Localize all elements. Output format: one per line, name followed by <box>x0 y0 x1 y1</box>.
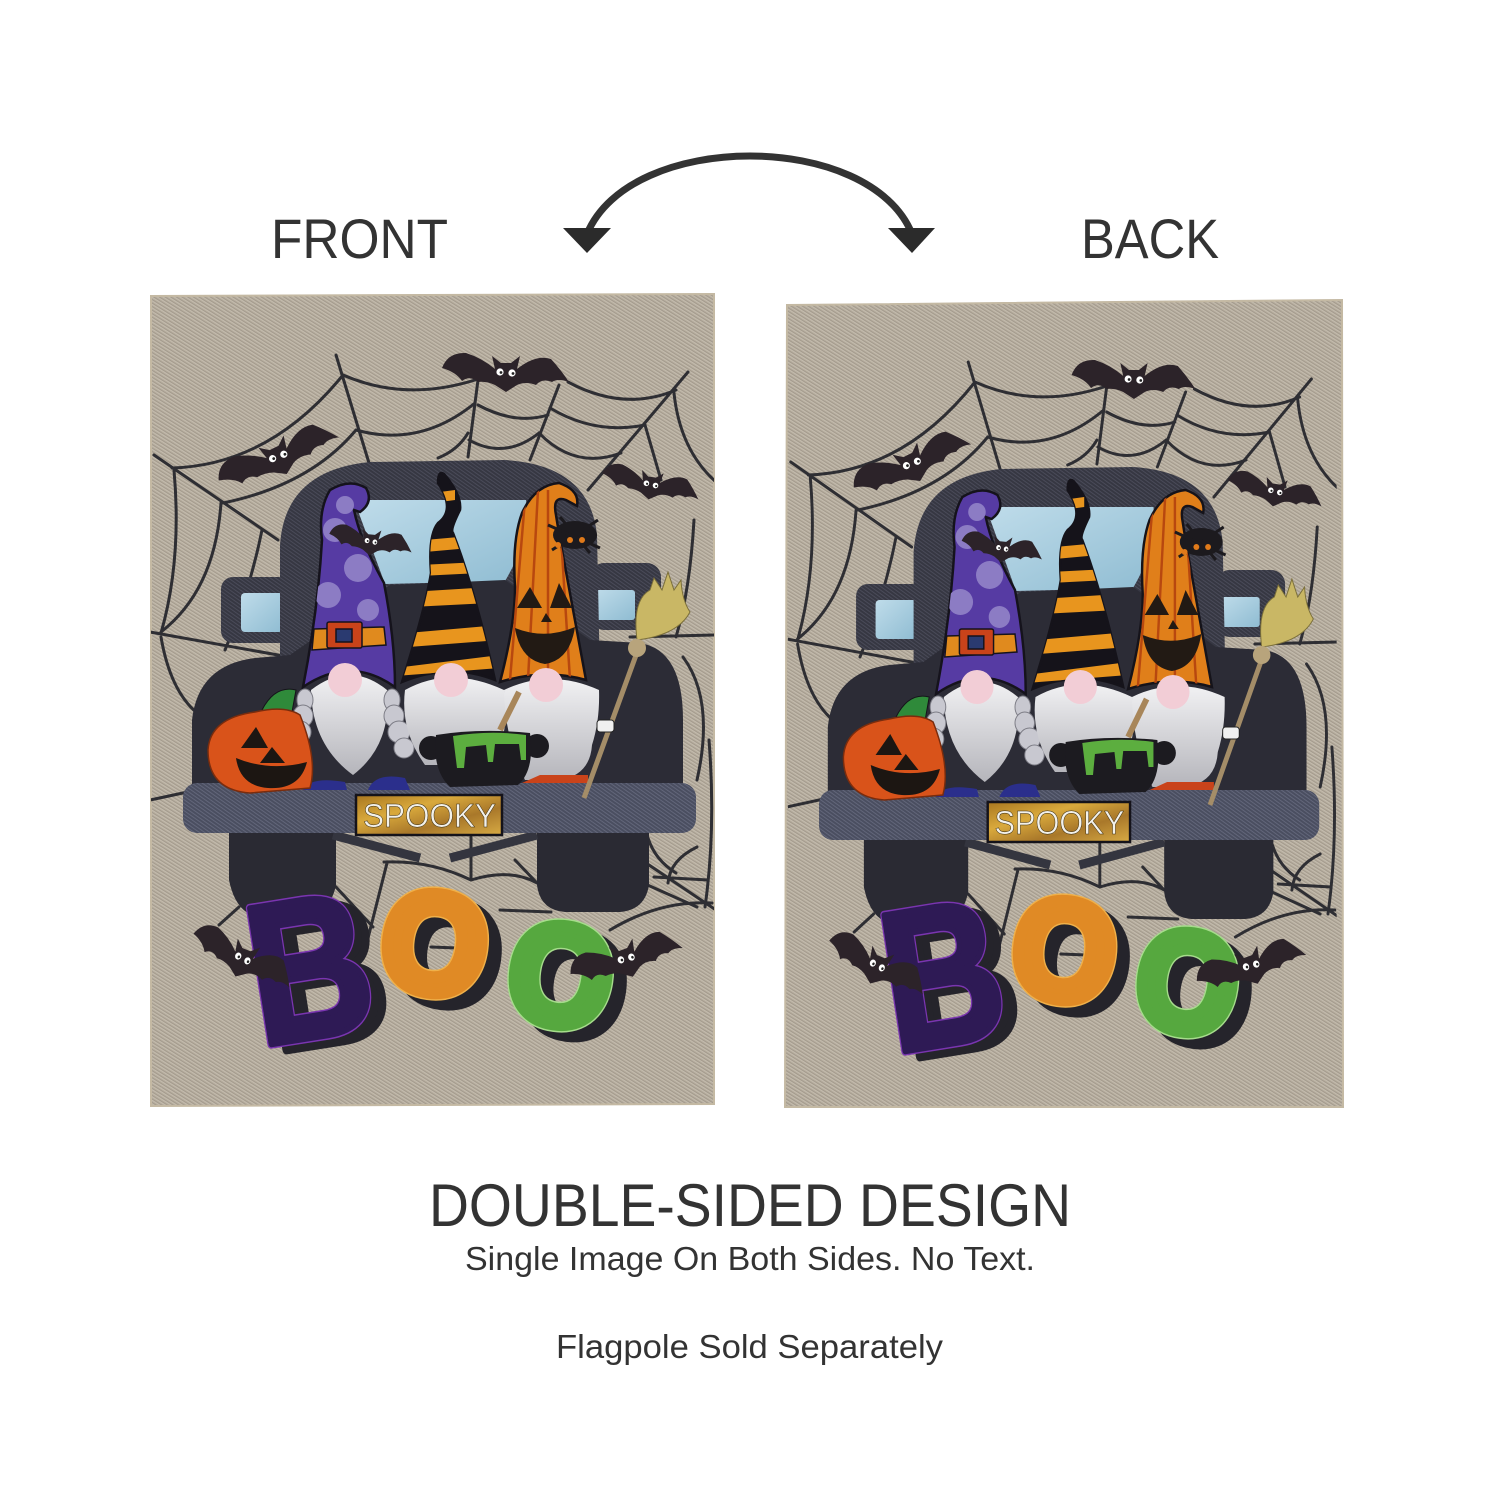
broom <box>584 572 690 798</box>
right braid <box>384 689 414 758</box>
right mirror <box>590 563 661 630</box>
BOO lettering <box>232 847 637 1096</box>
glitter bat on hat <box>327 523 414 560</box>
buckle <box>327 622 362 648</box>
letter O green: O <box>512 900 635 1070</box>
beard <box>404 678 506 765</box>
truck bed and fenders <box>192 580 683 790</box>
knob <box>628 639 646 657</box>
back glitter bats <box>820 927 1310 1004</box>
left mirror <box>221 577 291 643</box>
pumpkin <box>208 689 312 793</box>
back BOO lettering <box>866 853 1261 1103</box>
heading: BACK: BACK <box>1081 207 1219 270</box>
polka dots <box>315 496 379 621</box>
subheading: Single Image On Both Sides. No Text. <box>465 1240 1035 1277</box>
panel: back flag <box>785 300 1343 1107</box>
windshield <box>354 500 527 584</box>
back letter O: O <box>1003 867 1126 1036</box>
truck wheel right <box>537 830 649 912</box>
gnome: striped hat <box>395 473 506 765</box>
bat: top left <box>212 411 343 502</box>
licence plate <box>356 795 502 835</box>
back letter B: B <box>866 855 1018 1095</box>
glitter bat right <box>565 921 686 996</box>
handles <box>419 736 443 760</box>
nose <box>434 663 468 697</box>
hat <box>402 473 495 682</box>
back letter B: B <box>866 855 1018 1095</box>
gnome: pumpkin hat <box>500 483 599 783</box>
letter O green: O <box>499 890 623 1060</box>
jack-o-lantern face <box>515 583 575 664</box>
bristles <box>636 572 690 640</box>
hat ribs <box>510 490 570 680</box>
right mirror glass <box>593 590 635 620</box>
back flag fabric <box>785 300 1343 1107</box>
arrow: double-headed curved arrow <box>563 156 935 253</box>
heading: double-sided design: DOUBLE-SIDED DESIGN <box>429 1172 1071 1239</box>
back flag artwork <box>787 360 1339 1103</box>
back glitter bat right <box>1192 928 1310 1003</box>
letter O: O <box>385 868 510 1038</box>
beard <box>311 675 388 775</box>
bat: top right <box>599 462 702 507</box>
bat: top centre <box>442 353 569 392</box>
body <box>208 709 312 793</box>
spoon <box>500 692 519 730</box>
left mirror glass <box>241 593 283 632</box>
back letter O green: O <box>1139 909 1260 1077</box>
boots <box>303 776 410 790</box>
back letter B: B <box>881 861 1033 1101</box>
nose <box>529 668 563 702</box>
truck wheel left <box>229 830 336 918</box>
skeleton hand <box>597 720 614 732</box>
front flag artwork <box>150 353 716 1096</box>
truck <box>183 460 696 918</box>
rear bumper <box>183 783 696 833</box>
slime <box>453 733 526 768</box>
left braid <box>288 689 313 758</box>
panel: front flag <box>150 294 716 1106</box>
boots <box>522 775 588 783</box>
plate text: SPOOKY <box>363 797 496 834</box>
back plate text: SPOOKY <box>995 804 1124 841</box>
letter O green: O <box>499 890 623 1060</box>
back letter O: O <box>1003 867 1126 1036</box>
letter O: O <box>372 858 498 1028</box>
glitter bat left <box>184 920 300 997</box>
truck chassis <box>333 835 537 858</box>
glitter bats over lettering <box>184 920 686 997</box>
spider web <box>150 355 716 950</box>
back glitter bat left <box>820 927 933 1004</box>
letter B: B <box>232 849 387 1088</box>
handle <box>584 647 639 798</box>
stem <box>262 689 296 712</box>
back letter O green: O <box>1127 899 1248 1067</box>
letter B: B <box>247 855 402 1094</box>
face <box>236 727 307 788</box>
cauldron <box>419 692 549 787</box>
hat <box>303 483 395 687</box>
front flag fabric <box>151 294 714 1106</box>
beard <box>504 679 599 780</box>
back letter O green: O <box>1127 899 1248 1067</box>
letter B: B <box>232 849 387 1088</box>
buckle centre <box>336 629 352 642</box>
belt <box>312 627 386 650</box>
note: flagpole: Flagpole Sold Separately <box>556 1328 944 1365</box>
stripes <box>395 490 500 676</box>
pot <box>435 731 531 787</box>
nose <box>328 663 362 697</box>
gnome: purple hat <box>288 483 414 790</box>
hat <box>500 483 586 682</box>
back letter O: O <box>1016 877 1138 1046</box>
heading: FRONT: FRONT <box>271 207 448 270</box>
infographic canvas <box>150 152 1344 1365</box>
letter O: O <box>372 858 498 1028</box>
spider on hat <box>548 517 600 553</box>
truck cab <box>280 460 600 680</box>
